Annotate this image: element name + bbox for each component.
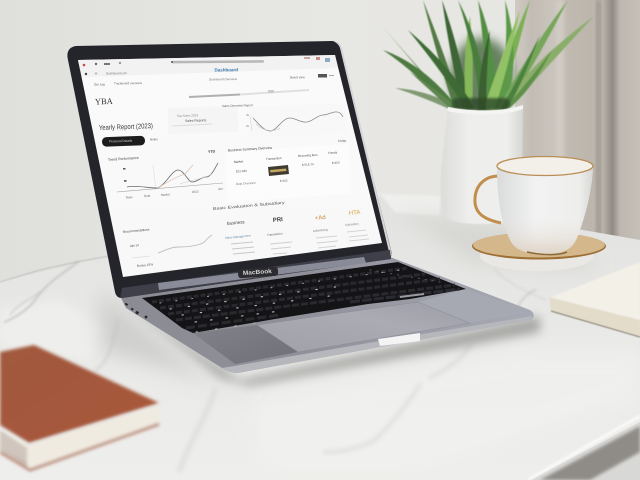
card: orange logo: Advertising <box>313 228 328 233</box>
panel: trend chart: Data <box>144 194 151 198</box>
left notebook <box>0 345 159 470</box>
navigation row: Dashboard Overview <box>209 77 238 81</box>
brown cover <box>0 345 159 443</box>
card: yellow logo <box>345 210 369 241</box>
spiral binding <box>0 432 27 465</box>
panel: business summary: Today <box>338 138 347 143</box>
chart: top line chart: 4k <box>246 113 250 117</box>
progress slider <box>189 90 309 97</box>
panel: business summary: Data Overview <box>236 181 257 186</box>
panel: trend chart: Trend Performance <box>108 156 139 162</box>
browser toolbar: Dashboard <box>214 67 238 72</box>
button: black pill <box>102 136 158 147</box>
panel: trend chart: Market <box>161 192 170 197</box>
card: Transaction <box>267 217 292 254</box>
keyboard well <box>142 262 466 333</box>
hinge strip <box>158 257 366 290</box>
panel: business summary: Transaction <box>266 156 282 161</box>
laptop lid <box>67 41 392 298</box>
heading: yearly report: Yearly Report (2023) <box>99 123 153 132</box>
card: Transaction: Transaction <box>267 231 283 237</box>
button: black pill: Notes <box>150 137 158 141</box>
trackpad <box>257 302 470 352</box>
panel: bottom left chart: Jan 14 <box>130 243 139 248</box>
right palm rest <box>418 289 530 323</box>
chart: top line chart: Sales Overview Report <box>222 103 253 108</box>
panel: trend chart <box>108 149 223 199</box>
panel: bottom left chart: Recommendations <box>123 227 150 234</box>
panel: trend chart: YTD <box>208 149 216 154</box>
chart: top line chart: 2k <box>246 124 250 128</box>
marble desk <box>0 194 640 480</box>
laptop base <box>120 257 534 373</box>
button: black pill: Personal Details <box>109 139 133 143</box>
plant <box>381 0 593 118</box>
panel: business summary: $ 342 <box>280 179 288 183</box>
card: Business: Sales Management <box>225 234 251 240</box>
front notch <box>378 333 420 346</box>
keyboard highlight <box>400 294 424 297</box>
card: Business <box>225 219 255 254</box>
browser toolbar: Dashboard.com <box>106 71 128 75</box>
card: summary notes <box>168 106 238 134</box>
side ports <box>125 303 147 318</box>
right notebook <box>549 262 640 337</box>
left palm rest <box>193 325 298 364</box>
panel: business summary: Business Summary Overview <box>228 146 273 152</box>
panel: business summary: $12,430 <box>236 169 247 173</box>
panel: business summary <box>224 138 352 202</box>
panel: bottom left chart: Bonus 15% <box>137 262 153 268</box>
camera badge <box>238 267 278 278</box>
base front edge <box>222 316 533 373</box>
card: summary notes: Top Notes 2023 <box>177 113 198 118</box>
panel: trend chart: Base <box>126 195 133 199</box>
panel: trend chart: 2022 <box>192 190 199 194</box>
white plant pot <box>441 105 523 224</box>
card: yellow logo: HTA <box>349 210 361 217</box>
section heading: Basic Evaluation & Subsidiary <box>213 200 285 211</box>
curtain <box>515 0 640 245</box>
navigation row: Board view <box>290 75 306 79</box>
navigation row <box>94 74 334 86</box>
panel: business summary: $ 820 <box>332 161 340 165</box>
heading: YBA: YBA <box>95 96 114 106</box>
panel: business summary: Recurring fees <box>298 153 318 158</box>
panel: trend chart: Jan <box>218 187 223 191</box>
key legends <box>160 270 440 332</box>
saucer <box>472 232 606 271</box>
navigation row: Our Log <box>94 82 105 86</box>
card: summary notes: Sales Reports <box>185 118 207 123</box>
thumbnail <box>268 165 289 176</box>
pages <box>0 405 159 470</box>
laptop screen <box>78 55 382 277</box>
card: yellow logo: Subsidiary <box>345 222 360 227</box>
card: Business: Business <box>227 219 246 226</box>
camera badge: MacBook <box>243 269 273 277</box>
panel: business summary: Market <box>234 159 243 164</box>
background wall <box>0 0 640 300</box>
card: orange logo: +Ad <box>315 215 326 222</box>
panel: business summary: Trends <box>328 150 338 155</box>
coffee cup <box>475 156 593 255</box>
panel: business summary: $ 516.74 <box>302 162 314 167</box>
panel: bottom left chart <box>123 227 212 268</box>
card: Transaction: PRI <box>273 217 283 224</box>
screen content <box>78 55 369 268</box>
card: orange logo <box>313 215 338 248</box>
chart: top line chart <box>222 103 346 137</box>
navigation row: Traceboard overview <box>114 81 143 85</box>
keyboard keys <box>152 268 460 328</box>
laptop shadow on desk <box>116 296 540 386</box>
marble veins <box>0 256 545 470</box>
browser toolbar <box>78 55 338 77</box>
feature cards <box>225 210 369 254</box>
